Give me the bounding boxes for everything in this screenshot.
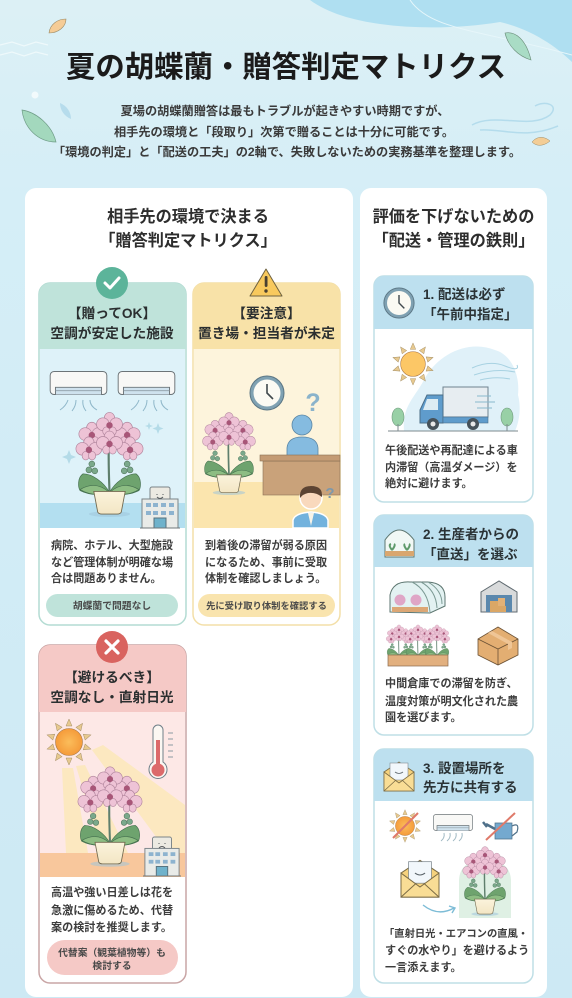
callout pill: 代替案（観葉植物等）も (58, 946, 166, 959)
intro text: 相手先の環境と「段取り」次第で贈ることは十分に可能です。 (114, 124, 454, 139)
rule text: 内滞留（高温ダメージ）を (385, 460, 518, 474)
illustration: orchid row (386, 625, 450, 666)
card: rule 1 (374, 276, 533, 502)
callout pill (46, 594, 178, 617)
card: avoid (39, 631, 186, 983)
card heading: 空調なし・直射日光 (50, 689, 174, 705)
sun beams (62, 745, 185, 853)
panel: gift matrix (25, 188, 353, 997)
leaf decorations (22, 19, 558, 145)
card text: 高温や強い日差しは花を (51, 885, 173, 899)
card text: 合は問題ありません。 (51, 571, 162, 585)
icon: sun (46, 719, 92, 765)
icon: no watering (483, 813, 518, 840)
illustration: truck in the heat (388, 343, 520, 431)
icon: worried staff (293, 485, 335, 528)
icon: no direct sun (389, 810, 421, 842)
card: OK (39, 267, 186, 625)
intro text: 「環境の判定」と「配送の工夫」の2軸で、失敗しないための実務基準を整理します。 (53, 144, 521, 159)
icon: arrow (423, 905, 455, 913)
card heading: 【贈ってOK】 (68, 305, 156, 321)
rule heading: 「直送」を選ぶ (423, 546, 518, 562)
icon: orchid (203, 413, 255, 495)
rule text: 「直射日光・エアコンの直風・ (384, 927, 528, 940)
callout pill: 検討する (92, 959, 132, 972)
matrix heading (99, 207, 277, 250)
icon: big envelope (401, 860, 439, 897)
card heading: 【要注意】 (232, 305, 301, 321)
rule text (385, 443, 518, 490)
illustration: cardboard box (478, 627, 518, 665)
panel: delivery rules (360, 188, 547, 997)
rules heading (373, 208, 534, 250)
card text (51, 885, 173, 934)
rule text (384, 927, 529, 974)
rule heading: 2. 生産者からの (423, 526, 519, 542)
icon: question mark: ? (305, 389, 321, 417)
rule text (385, 676, 518, 724)
rules heading: 「配送・管理の鉄則」 (373, 231, 534, 250)
matrix heading: 「贈答判定マトリクス」 (99, 231, 277, 250)
icon: smiling building (140, 487, 180, 528)
callout pill: 先に受け取り体制を確認する (206, 600, 327, 611)
rule heading: 3. 設置場所を (423, 760, 506, 776)
icon: orchid (78, 767, 142, 867)
icon: envelope (384, 762, 414, 791)
rule text: 園を選びます。 (385, 710, 462, 724)
icon: person at desk (260, 415, 340, 495)
icon: X mark (96, 631, 128, 663)
rules heading: 評価を下げないための (373, 208, 534, 226)
icon: sad building (143, 837, 181, 876)
icon: thermometer (149, 725, 173, 778)
rule text: 午後配送や再配達による車 (385, 443, 518, 457)
card text (205, 538, 327, 585)
callout pill (47, 940, 178, 975)
icon: clock (250, 376, 284, 410)
rule text: 絶対に避けます。 (385, 476, 473, 490)
card: rule 3 (374, 749, 533, 983)
card text (51, 538, 173, 585)
card text: など管理体制が明確な場 (51, 555, 173, 569)
icon: orchid in safe spot (459, 847, 511, 918)
card text: 体制を確認しましょう。 (205, 571, 326, 585)
rule heading: 先方に共有する (423, 779, 518, 795)
card heading (50, 669, 174, 705)
title: 夏の胡蝶蘭・贈答判定マトリクス (66, 51, 506, 84)
card text: 到着後の滞留が弱る原因 (205, 538, 327, 552)
illustration: warehouse (481, 581, 517, 612)
card heading: 【避けるべき】 (64, 669, 160, 685)
card text: 案の検討を推奨します。 (51, 920, 172, 934)
card heading (198, 305, 335, 341)
card text: 急激に傷めるため、代替 (51, 903, 173, 917)
rule text: 温度対策が明文化された農 (385, 694, 518, 708)
card heading (50, 305, 174, 341)
icon: sparkles (62, 422, 164, 464)
matrix heading: 相手先の環境で決まる (107, 207, 269, 226)
icon: orchid (76, 412, 143, 517)
rule heading (423, 526, 519, 562)
icon: check (96, 267, 128, 299)
intro text (53, 103, 521, 159)
rule text: すぐの水やり」を避けるよう (385, 943, 529, 957)
intro text: 夏場の胡蝶蘭贈答は最もトラブルが起きやすい時期ですが、 (121, 103, 449, 118)
icon: greenhouse (385, 530, 414, 557)
icon: worried staff: ? (325, 485, 335, 502)
rule text: 一言添えます。 (385, 960, 462, 974)
rule heading: 「午前中指定」 (423, 306, 518, 322)
card: rule 2 (374, 515, 533, 735)
card text: 病院、ホテル、大型施設 (51, 538, 173, 552)
card heading: 空調が安定した施設 (50, 325, 174, 341)
rule heading: 1. 配送は必ず (423, 286, 506, 302)
icon: no AC draft (433, 814, 473, 841)
illustration: greenhouse (390, 582, 445, 613)
icon: clock (384, 288, 414, 318)
rule heading (423, 286, 518, 322)
card text: になるため、事前に受取 (205, 555, 327, 569)
card: caution (193, 269, 340, 625)
card heading: 置き場・担当者が未定 (198, 325, 335, 341)
icon: air conditioners (50, 371, 175, 411)
icon: warning (250, 269, 282, 296)
callout pill (198, 594, 335, 617)
callout pill: 胡蝶蘭で問題なし (73, 599, 151, 612)
rule text: 中間倉庫での滞留を防ぎ、 (385, 676, 518, 690)
rule heading (423, 760, 518, 795)
